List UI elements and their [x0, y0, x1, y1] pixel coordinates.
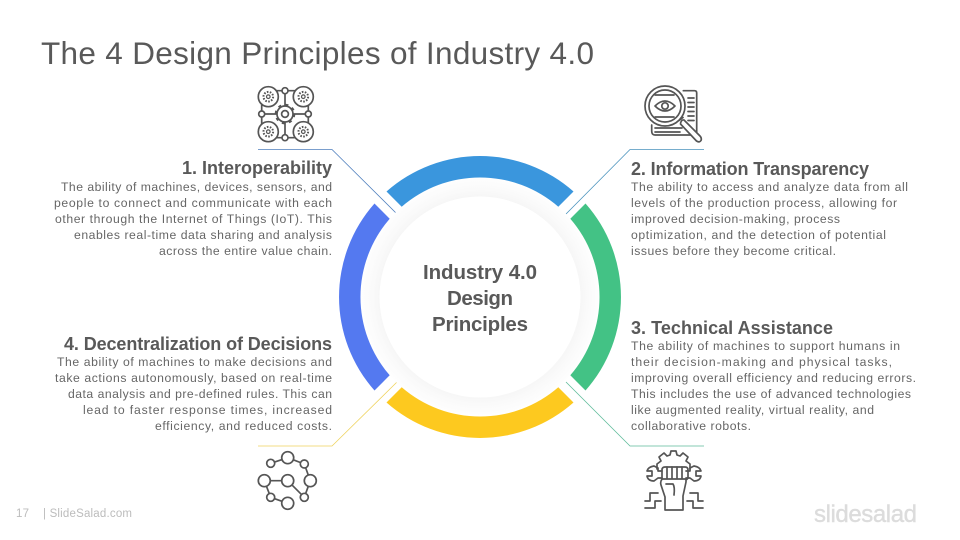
central circle with title: Industry 4.0: [423, 261, 537, 284]
text block: 4. Decentralization of Decisions: [55, 334, 332, 433]
text block: 1. Interoperability: enables real-time data sharing and analysis: [74, 228, 332, 242]
text block: 3. Technical Assistance: like augmented reality, virtual reality, and: [631, 403, 874, 417]
connector line: technical assistance: [566, 382, 704, 446]
text block: 1. Interoperability: across the entire value chain.: [159, 244, 332, 258]
text block: 3. Technical Assistance: their decision-making and physical tasks,: [631, 355, 892, 369]
icon: gears network: [258, 87, 313, 142]
central circle with title: [360, 178, 600, 416]
text block: 3. Technical Assistance: improving overall efficiency and reducing errors.: [631, 371, 916, 385]
text block: 1. Interoperability: The ability of machines, devices, sensors, and: [61, 180, 332, 194]
text block: 4. Decentralization of Decisions: lead to faster response times, increased: [83, 403, 332, 417]
text block: 3. Technical Assistance: [631, 318, 916, 433]
text block: 2. Information Transparency: issues before they become critical.: [631, 244, 836, 258]
text block: 2. Information Transparency: improved decision-making, process: [631, 212, 840, 226]
ring segment: green right: [570, 204, 621, 390]
text block: 4. Decentralization of Decisions: efficiency, and reduced costs.: [155, 419, 332, 433]
logo: slidesalad: [814, 501, 917, 528]
text block: 4. Decentralization of Decisions: 4. Decentralization of Decisions: [64, 334, 332, 354]
central circle with title: Design: [447, 287, 513, 310]
text block: 1. Interoperability: people to connect and communicate with each: [54, 196, 332, 210]
text block: 2. Information Transparency: The ability to access and analyze data from all: [631, 180, 908, 194]
icon: connected nodes: [258, 452, 316, 509]
text block: 1. Interoperability: other through the Internet of Things (IoT). This: [55, 212, 332, 226]
text block: 1. Interoperability: [54, 158, 332, 258]
connector line: information transparency: [566, 150, 704, 214]
text block: 3. Technical Assistance: collaborative robots.: [631, 419, 751, 433]
text block: 4. Decentralization of Decisions: data analysis and pre-defined rules. This can: [68, 387, 332, 401]
connector line: decentralization: [258, 382, 397, 446]
text block: 4. Decentralization of Decisions: The ability of machines to make decisions and: [57, 355, 332, 369]
page number and site: 17: [16, 508, 29, 520]
central circle with title: Principles: [432, 313, 528, 336]
connector line: interoperability: [258, 150, 397, 214]
title: The 4 Design Principles of Industry 4.0: [41, 35, 594, 71]
text block: 3. Technical Assistance: The ability of machines to support humans in: [631, 339, 900, 353]
ring segment: yellow bottom: [386, 387, 574, 438]
page number and site: | SlideSalad.com: [43, 508, 132, 520]
icon: magnifier over document: [645, 86, 701, 142]
text block: 4. Decentralization of Decisions: take actions autonomously, based on real-time: [55, 371, 332, 385]
text block: 1. Interoperability: 1. Interoperability: [182, 158, 332, 178]
ring segment: indigo left: [339, 204, 390, 390]
icon: fist with wrench and gear: [645, 451, 703, 510]
text block: 3. Technical Assistance: 3. Technical Assistance: [631, 318, 833, 338]
text block: 2. Information Transparency: 2. Information Transparency: [631, 159, 869, 179]
text block: 2. Information Transparency: levels of the production process, allowing for: [631, 196, 897, 210]
text block: 3. Technical Assistance: This includes the use of advanced technologies: [631, 387, 911, 401]
text block: 2. Information Transparency: [631, 159, 908, 258]
text block: 2. Information Transparency: optimization, and the detection of potential: [631, 228, 886, 242]
ring segment: blue top: [386, 156, 574, 207]
